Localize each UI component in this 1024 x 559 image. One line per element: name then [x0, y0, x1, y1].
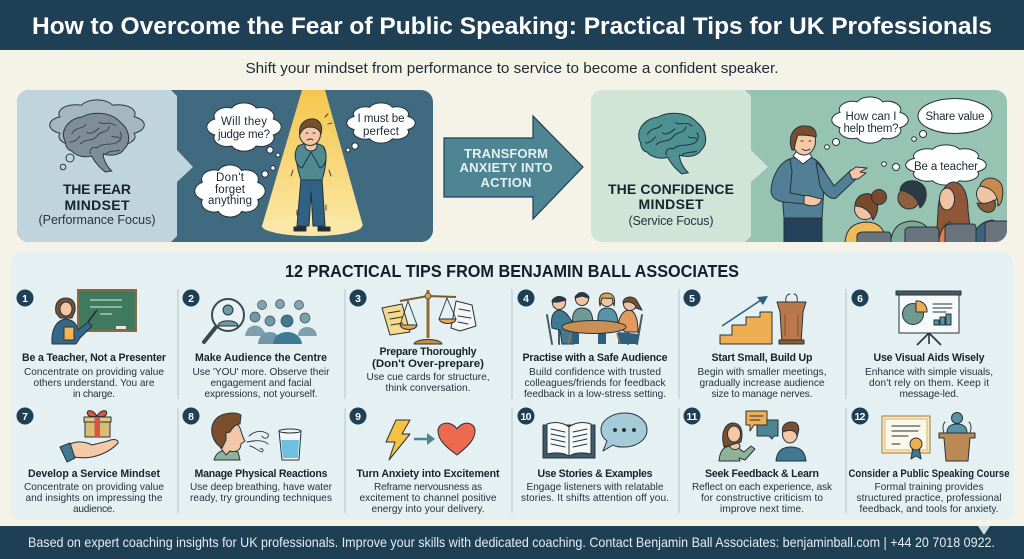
tip description: Build confidence with trusted: [529, 367, 661, 378]
badge 11: [684, 408, 700, 424]
tip description: [521, 482, 669, 504]
heading: the fear mindset: (Performance Focus): [38, 213, 156, 227]
audience seated: [845, 178, 1010, 245]
tip title: Make Audience the Centre: [195, 352, 327, 364]
tip description: ready, try grounding techniques: [190, 493, 332, 504]
thought bubble: don't forget anything: anything: [208, 195, 252, 207]
tip title: Practise with a Safe Audience: [522, 352, 668, 364]
arrow: transform anxiety into action: ANXIETY INTO: [460, 160, 552, 175]
tips heading: 12 PRACTICAL TIPS FROM BENJAMIN BALL ASSOCIATES: [285, 261, 739, 281]
tip title: Manage Physical Reactions: [194, 468, 328, 480]
tip description: [698, 367, 826, 400]
icon: magnifier over audience: [204, 299, 317, 344]
thought bubble: I must be perfect: perfect: [363, 126, 400, 138]
icon: hand offering gift: [60, 411, 118, 462]
heading: the fear mindset: THE FEAR: [63, 181, 131, 197]
tip 3: [350, 290, 490, 394]
badge 8: 8: [188, 411, 194, 423]
tip description: Concentrate on providing value: [24, 482, 164, 493]
tip description: Reflect on each experience, ask: [692, 482, 833, 493]
tip description: [190, 482, 333, 504]
tip description: [856, 482, 1002, 515]
icon: projector screen with charts: [896, 291, 961, 345]
badge 4: 4: [523, 293, 529, 305]
heading: the fear mindset: [38, 181, 156, 227]
badge 12: [852, 408, 868, 424]
thought bubble: how can I help them: How can I: [846, 111, 896, 123]
tip 1: [16, 290, 166, 400]
badge 7: 7: [22, 411, 28, 423]
tip 2: [182, 290, 330, 400]
badge 12: 12: [854, 411, 866, 423]
badge 4: [518, 290, 534, 306]
badge 8: [182, 408, 200, 424]
tip description: Reframe nervousness as: [374, 482, 482, 493]
thought bubble: share value: [912, 98, 992, 141]
badge 1: [16, 290, 34, 306]
tip description: in charge.: [73, 389, 115, 400]
thought bubble: will they judge me: Will they: [221, 116, 267, 128]
badge 2: [182, 290, 200, 306]
tip title: Turn Anxiety into Excitement: [356, 468, 500, 480]
icon: teacher at chalkboard: [52, 290, 136, 344]
tip description: improve next time.: [720, 504, 804, 515]
thought bubble: share value: Share value: [926, 111, 984, 123]
tip 11: [684, 408, 833, 515]
tip title: Prepare Thoroughly: [380, 346, 477, 358]
tip title: Use Stories & Examples: [538, 468, 653, 480]
thought bubble: don't forget anything: Don't: [216, 172, 245, 184]
tip 8: [182, 408, 333, 504]
footer banner: [0, 526, 1024, 559]
tip description: [24, 367, 164, 400]
arrow: transform anxiety into action: TRANSFORM: [464, 146, 548, 161]
tip description: think conversation.: [386, 383, 470, 394]
badge 6: 6: [857, 293, 863, 305]
tip description: don't rely on them. Keep it: [869, 378, 989, 389]
badge 6: [852, 290, 868, 306]
icon: group around table: [547, 292, 642, 344]
panel: 12 practical tips: [11, 252, 1013, 520]
panel: confidence mindset: [591, 90, 1010, 245]
thought bubble: will they judge me: judge me?: [217, 129, 270, 141]
tip description: gradually increase audience: [700, 378, 825, 389]
tip 7: [16, 408, 164, 515]
arrow: transform anxiety into action: [444, 116, 583, 219]
icon: stairs and podium: [720, 294, 806, 344]
thought bubble: don't forget anything: [195, 165, 275, 217]
tip description: Use cue cards for structure,: [366, 372, 490, 383]
tip title: Use Visual Aids Wisely: [874, 352, 985, 364]
badge 9: 9: [355, 411, 361, 423]
thought bubble: I must be perfect: [346, 103, 415, 152]
tip description: [366, 372, 490, 394]
tip description: and insights on impressing the: [26, 493, 163, 504]
tip description: stories. It shifts attention off you.: [521, 493, 669, 504]
badge 2: 2: [188, 293, 194, 305]
badge 3: 3: [355, 293, 361, 305]
tip description: feedback, and tools for anxiety.: [860, 504, 998, 515]
tip 5: [684, 290, 826, 400]
badge 5: 5: [689, 293, 695, 305]
icon: open book and speech bubble: [543, 413, 647, 458]
icon: confidence brain: [639, 113, 706, 174]
icon: certificate and course speaker: [882, 412, 975, 461]
thought bubble: I must be perfect: I must be: [358, 113, 404, 125]
tip title: Consider a Public Speaking Course: [848, 468, 1010, 480]
spotlight: [262, 90, 363, 236]
tip description: Enhance with simple visuals,: [865, 367, 993, 378]
tip description: colleagues/friends for feedback: [524, 378, 666, 389]
tip description: Begin with smaller meetings,: [698, 367, 826, 378]
heading: the fear mindset: MINDSET: [64, 197, 130, 213]
panel: fear mindset: [17, 90, 433, 242]
tip 4: [518, 290, 668, 400]
tip description: [24, 482, 164, 515]
tip description: [192, 367, 330, 400]
tip 10: [518, 408, 669, 504]
badge 10: [518, 408, 534, 424]
tip title: Start Small, Build Up: [712, 352, 813, 364]
tip description: message-led.: [900, 389, 958, 400]
tip description: [524, 367, 666, 400]
confident speaker figure: [771, 126, 867, 245]
tip description: excitement to channel positive: [360, 493, 497, 504]
icon: lightning to heart: [386, 420, 475, 460]
heading: the confidence mindset: THE CONFIDENCE: [608, 181, 734, 197]
title: How to Overcome the Fear of Public Speaking: Practical Tips for UK Professionals: [32, 13, 992, 40]
tip description: engagement and facial: [210, 378, 312, 389]
tip description: size to manage nerves.: [712, 389, 812, 400]
thought bubble: be a teacher: Be a teacher: [914, 161, 978, 173]
tip description: Engage listeners with relatable: [526, 482, 664, 493]
heading: the confidence mindset: (Service Focus): [628, 214, 714, 228]
heading: the confidence mindset: [608, 181, 734, 228]
tip description: Use 'YOU' more. Observe their: [192, 367, 330, 378]
icon: balance scale with notes: [382, 290, 476, 344]
tip description: Formal training provides: [874, 482, 984, 493]
heading: the confidence mindset: MINDSET: [638, 196, 704, 212]
badge 10: 10: [520, 411, 532, 423]
thought bubble: how can I help them: [825, 97, 908, 149]
tip description: Concentrate on providing value: [24, 367, 164, 378]
tip description: [865, 367, 993, 400]
tip description: others understand. You are: [34, 378, 155, 389]
tip title: (Don't Over-prepare): [372, 358, 484, 370]
tip description: energy into your delivery.: [372, 504, 484, 515]
thought bubble: don't forget anything: forget: [215, 184, 246, 196]
badge 7: [16, 408, 34, 424]
header banner: [0, 0, 1024, 50]
badge 11: 11: [686, 411, 698, 423]
icon: two people exchanging feedback: [719, 411, 806, 461]
tip description: feedback in a low-stress setting.: [524, 389, 666, 400]
icon: fear brain in storm cloud: [50, 100, 144, 172]
tip 6: [852, 290, 993, 400]
thought bubble: how can I help them: help them?: [844, 123, 898, 135]
badge 9: [350, 408, 366, 424]
nervous speaker figure: [291, 114, 332, 231]
tip description: [360, 482, 497, 515]
tip title: Develop a Service Mindset: [28, 468, 160, 480]
tip 12: [848, 408, 1010, 515]
arrow: transform anxiety into action: ACTION: [480, 175, 532, 190]
tip title: Seek Feedback & Learn: [705, 468, 819, 480]
tip description: audience.: [73, 504, 115, 515]
badge 5: [684, 290, 700, 306]
subtitle: Shift your mindset from performance to service to become a confident speaker.: [246, 60, 778, 77]
tip description: expressions, not yourself.: [204, 389, 318, 400]
tip description: Use deep breathing, have water: [190, 482, 333, 493]
tip description: [692, 482, 833, 515]
icon: breathing and glass of water: [212, 413, 301, 460]
tip description: structured practice, professional: [856, 493, 1002, 504]
thought bubble: be a teacher: [882, 145, 986, 185]
tip title: Be a Teacher, Not a Presenter: [22, 352, 166, 364]
tip 9: [350, 408, 500, 515]
tip description: for constructive criticism to: [701, 493, 823, 504]
tip title: [372, 346, 484, 370]
thought bubble: will they judge me: [207, 103, 281, 157]
badge 1: 1: [22, 293, 28, 305]
